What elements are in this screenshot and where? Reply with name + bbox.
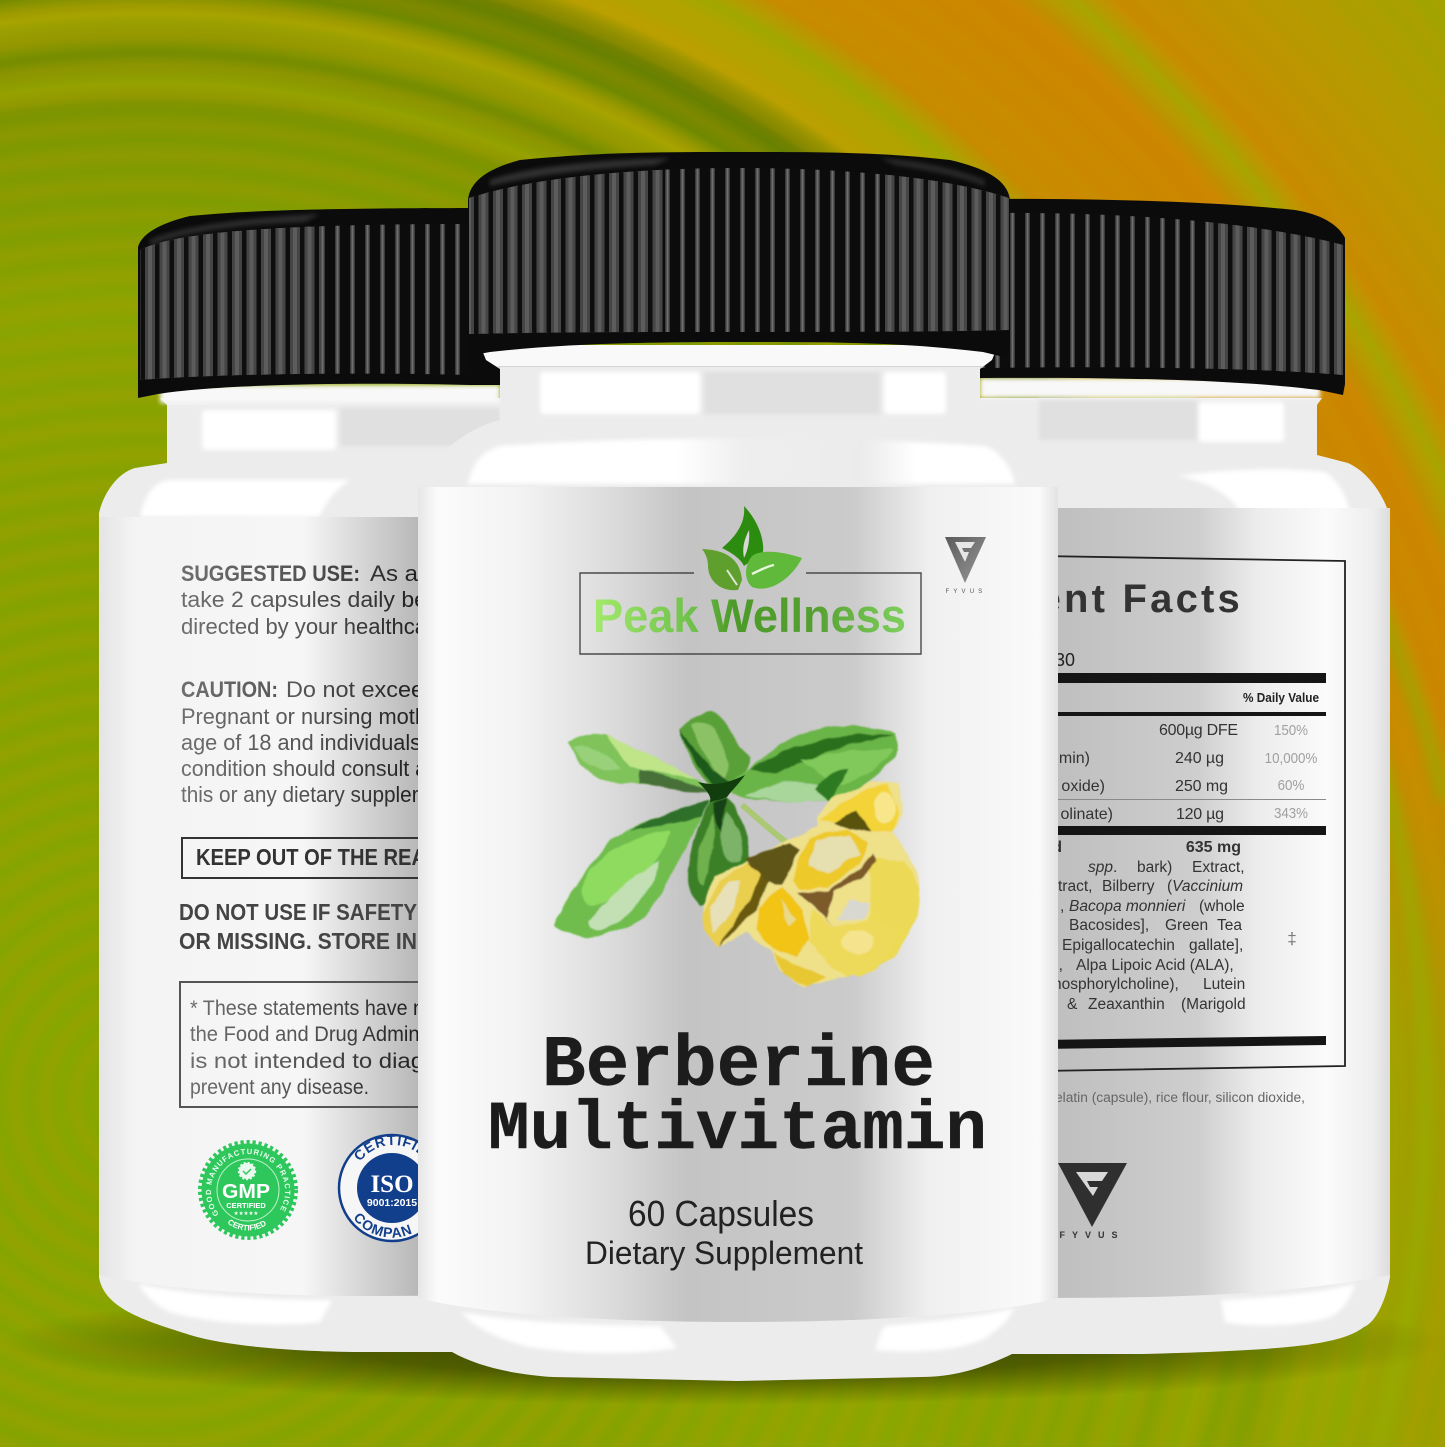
ISO 9001 certified seal — [338, 1134, 418, 1242]
daily value percentages: 10,000% — [1265, 749, 1317, 766]
center bottle label area — [418, 487, 1058, 1322]
daily value column header: % Daily Value — [1243, 690, 1319, 705]
proprietary blend ingredients: bark) — [1137, 859, 1172, 876]
GMP certified seal: GMP — [222, 1181, 270, 1203]
suggested use text — [181, 561, 428, 639]
vitamin rows: 120 µg — [1176, 806, 1224, 823]
yellow flower — [703, 780, 920, 987]
thick rule middle — [1040, 826, 1326, 835]
keep out of reach box — [182, 838, 452, 878]
proprietary blend ingredients: Extract, — [1192, 859, 1245, 876]
center bottle: front label — [418, 152, 1058, 1381]
ISO 9001 certified seal: COMPAN — [354, 1214, 412, 1238]
center bottle lip and neck — [480, 345, 998, 369]
double dagger marker: ‡ — [1287, 929, 1297, 948]
caution text: Pregnant or nursing moth — [181, 704, 427, 729]
stem to flower — [742, 805, 786, 842]
left bottle cap — [138, 208, 500, 398]
daily value percentages — [1265, 721, 1317, 821]
proprietary blend ingredients: Vaccinium — [1172, 878, 1243, 895]
suggested use text: take 2 capsules daily be — [181, 587, 427, 612]
proprietary blend ingredients: tract, — [1058, 878, 1092, 895]
vitamin rows — [1059, 722, 1238, 823]
product title: Berberine — [542, 1024, 935, 1107]
GMP certified seal: CERTIFIED — [228, 1220, 266, 1230]
leaf: upper left — [566, 734, 710, 792]
icon: three green leaves — [702, 506, 802, 590]
nutrient facts heading: ient Facts — [1024, 577, 1243, 621]
capsule count: 60 Capsules — [628, 1193, 814, 1234]
product title: Multivitamin — [488, 1091, 987, 1169]
vitamin rows: 240 µg — [1175, 750, 1224, 767]
caution text: this or any dietary supplem — [181, 782, 429, 807]
medium rule — [1040, 712, 1326, 716]
logo frame — [580, 573, 921, 654]
vitamin rows: 600µg DFE — [1159, 722, 1238, 739]
center bottle body — [418, 367, 1058, 1381]
suggested use text: directed by your healthca — [181, 614, 428, 639]
vitamin rows: min) — [1059, 750, 1090, 767]
right bottle neck highlight — [980, 378, 1320, 442]
center bottle bottom highlights — [462, 1308, 1014, 1353]
leaf: lower left — [555, 800, 710, 936]
vitamin rows: oxide) — [1061, 778, 1105, 795]
left bottle body — [99, 398, 500, 1352]
keep out of reach box: KEEP OUT OF THE REA — [196, 844, 426, 870]
proprietary blend ingredients: spp — [1088, 859, 1113, 876]
FDA disclaimer box — [180, 982, 450, 1107]
dietary supplement subtitle: Dietary Supplement — [585, 1235, 863, 1271]
vitamin rows: olinate) — [1061, 806, 1113, 823]
GMP certified seal: ★★★★★ — [234, 1210, 258, 1217]
GMP certified seal — [198, 1140, 298, 1240]
daily value percentages: 60% — [1278, 776, 1304, 793]
left bottle bottom highlight — [138, 1284, 332, 1324]
left bottle: back label with directions — [99, 208, 500, 1352]
FYVUS logo large — [1058, 1163, 1127, 1240]
ISO 9001 certified seal: CERTIFIE — [354, 1136, 418, 1160]
FYVUS logo large: FYVUS — [1059, 1230, 1125, 1240]
safety warning — [179, 899, 417, 954]
FDA disclaimer box: * These statements have n — [190, 996, 424, 1020]
center bottle shoulder highlight — [468, 438, 1015, 484]
FDA disclaimer box: is not intended to diag — [190, 1049, 424, 1073]
brand name: Peak Wellness — [593, 589, 906, 642]
caution text: Do not excee — [286, 677, 424, 702]
proprietary blend ingredients: Zeaxanthin — [1088, 996, 1165, 1013]
daily value percentages: 150% — [1274, 721, 1308, 738]
proprietary blend ingredients: hosphorylcholine), — [1053, 976, 1179, 993]
Peak Wellness logo — [580, 506, 921, 654]
proprietary blend ingredients: Tea — [1217, 917, 1242, 934]
proprietary blend ingredients: & — [1067, 996, 1078, 1013]
right bottle bottom highlight — [1221, 1284, 1355, 1325]
left bottle label area — [99, 517, 470, 1296]
nutrient facts panel border — [1040, 556, 1345, 1071]
caution text — [181, 677, 429, 807]
servings per container: 30 — [1055, 650, 1075, 670]
proprietary blend ingredients: Bacopa monnieri — [1069, 898, 1186, 915]
leaf: right — [730, 726, 898, 802]
proprietary blend amount: 635 mg — [1186, 839, 1241, 856]
center bottle neck highlights — [540, 372, 946, 414]
right bottle label area — [1040, 508, 1390, 1298]
GMP certified seal: CERTIFIED — [226, 1201, 266, 1210]
caution text: condition should consult a — [181, 756, 428, 781]
FDA disclaimer box: the Food and Drug Admini — [190, 1022, 424, 1046]
proprietary blend ingredients: m — [1040, 859, 1053, 876]
right bottle body — [980, 398, 1390, 1354]
proprietary blend ingredients: Alpa Lipoic Acid (ALA), — [1076, 957, 1234, 974]
product title — [488, 1024, 987, 1169]
FYVUS logo small — [945, 537, 987, 595]
GMP certified seal: GOOD MANUFACTURING PRACTICE — [206, 1148, 290, 1216]
vitamin rows: 250 mg — [1175, 778, 1228, 795]
daily value percentages: 343% — [1274, 804, 1308, 821]
caution text: age of 18 and individuals — [181, 730, 421, 755]
right bottle cap — [980, 199, 1345, 395]
ground shadow beneath the bottles — [0, 1280, 1445, 1405]
proprietary blend ingredients: Green — [1165, 917, 1208, 934]
proprietary blend ingredients: , — [1060, 898, 1064, 915]
ISO 9001 certified seal: 9001:2015 — [367, 1197, 417, 1209]
proprietary blend ingredients: Bilberry — [1102, 878, 1155, 895]
plant center node — [698, 775, 745, 802]
proprietary blend ingredients: e, — [1050, 957, 1063, 974]
botanical illustration: berberine plant — [555, 711, 920, 987]
caution text: CAUTION: — [181, 677, 278, 702]
right bottle: supplement facts label — [980, 199, 1390, 1354]
proprietary blend ingredients — [1040, 859, 1246, 1013]
thick rule bottom — [1040, 1036, 1326, 1049]
proprietary blend ingredients: ( — [1167, 878, 1173, 895]
proprietary blend amount — [1052, 839, 1241, 856]
left bottle shoulder highlight — [140, 480, 351, 517]
ISO 9001 certified seal: ISO — [370, 1171, 414, 1198]
safety warning: OR MISSING. STORE IN — [179, 928, 417, 954]
thick rule top — [1040, 673, 1326, 683]
FDA disclaimer box: prevent any disease. — [190, 1075, 369, 1099]
proprietary blend ingredients: Epigallocatechin — [1062, 937, 1175, 954]
proprietary blend ingredients: (Marigold — [1181, 996, 1246, 1013]
suggested use text: As a — [370, 561, 419, 586]
proprietary blend amount: d — [1052, 839, 1062, 856]
safety warning: DO NOT USE IF SAFETY — [179, 899, 417, 925]
leaf: bottom — [688, 797, 750, 907]
proprietary blend ingredients: . — [1113, 859, 1117, 876]
proprietary blend ingredients: (whole — [1199, 898, 1245, 915]
proprietary blend ingredients: Bacosides], — [1069, 917, 1149, 934]
FYVUS logo small: FYVUS — [945, 589, 987, 595]
center bottle cap — [468, 152, 1010, 358]
proprietary blend ingredients: gallate], — [1189, 937, 1243, 954]
leaf: top — [680, 711, 750, 790]
left bottle neck highlight — [160, 385, 500, 450]
other ingredients line: elatin (capsule), rice flour, silicon dioxide, — [1055, 1090, 1305, 1105]
proprietary blend ingredients: Lutein — [1203, 976, 1245, 993]
right bottle shoulder highlight — [1178, 469, 1350, 512]
suggested use text: SUGGESTED USE: — [181, 561, 360, 586]
